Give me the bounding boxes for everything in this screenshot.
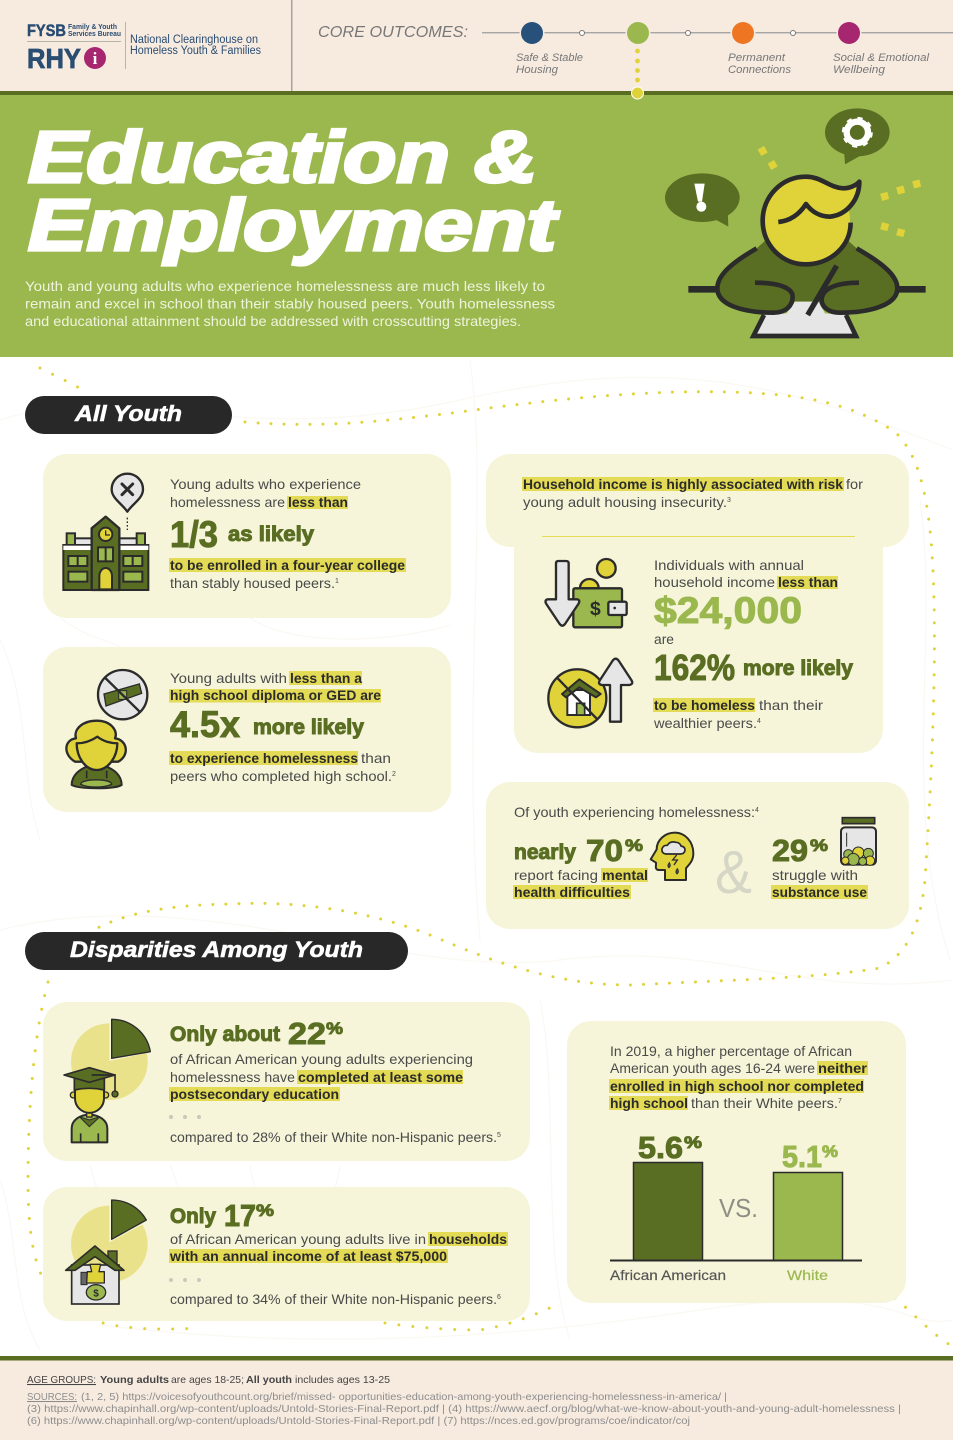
logo: FYSB and RHY: RHY	[27, 43, 81, 74]
text: income heading: 3	[727, 497, 731, 504]
text: one third statistic: Young adults who experience	[170, 476, 361, 492]
core outcomes timeline: Social & Emotional	[833, 52, 930, 64]
text: comparison intro	[609, 1043, 868, 1111]
bar chart: %	[822, 1142, 838, 1161]
logo: FYSB and RHY: National Clearinghouse on	[130, 34, 258, 46]
text: 17 percent statistic: compared to 34% of their White non-Hispanic peers.	[170, 1291, 497, 1307]
text: one third statistic: to be enrolled in a four-year college	[170, 557, 405, 573]
text: income heading: for	[846, 476, 863, 492]
text: 70 percent statistic: nearly	[514, 841, 576, 864]
text: 29 percent statistic: substance use	[772, 884, 867, 900]
bar chart: 5.6	[638, 1130, 683, 1165]
text: 4.5x statistic: high school diploma or GED are	[170, 687, 381, 703]
text: 70 percent statistic: report facing	[514, 867, 598, 883]
icon: pie chart and graduate	[64, 1017, 153, 1142]
logo: FYSB and RHY: Homeless Youth & Families	[130, 45, 261, 57]
footer	[0, 1356, 953, 1440]
icon: student with crossed-out diploma	[66, 670, 147, 788]
logo: FYSB and RHY: i	[93, 49, 98, 68]
logo: FYSB and RHY: Services Bureau	[68, 29, 121, 38]
text: comparison intro: high school	[610, 1095, 688, 1111]
age groups note: AGE GROUPS:	[27, 1374, 96, 1386]
header band	[0, 0, 953, 91]
core outcomes timeline: Safe & Stable	[516, 52, 583, 64]
hero banner	[0, 49, 953, 357]
text: 22 percent statistic: 5	[497, 1132, 501, 1139]
text: 4.5x statistic: than	[361, 750, 391, 766]
panel: household income	[486, 454, 909, 753]
intro text: and educational attainment should be addressed with crosscutting strategies.	[25, 313, 521, 329]
age groups note: All youth	[246, 1374, 292, 1386]
ampersand: &	[715, 839, 752, 906]
text: 17 percent statistic: with an annual income of at least $75,000	[169, 1248, 447, 1264]
text: one third statistic: 1/3	[170, 514, 218, 555]
icon: jar of pills	[841, 818, 876, 865]
icon: head with storm cloud	[651, 833, 693, 880]
bar chart: White	[787, 1267, 828, 1283]
text: income heading: young adult housing insecurity.	[523, 494, 727, 510]
text: 22 percent statistic: postsecondary education	[170, 1086, 339, 1102]
text: 22 percent statistic: Only about	[170, 1023, 280, 1046]
core outcomes timeline	[482, 20, 953, 76]
text: 22 percent statistic	[169, 1016, 501, 1145]
text: 29 percent statistic: %	[810, 836, 828, 855]
text: comparison intro: American youth ages 16-24 were	[610, 1060, 815, 1076]
panel: school enrollment comparison	[567, 1021, 906, 1303]
text: income statistic: wealthier peers.	[653, 715, 757, 731]
text: comparison intro: enrolled in high school nor completed	[610, 1078, 864, 1094]
text: 4.5x statistic: 4.5x	[170, 704, 240, 745]
text: 22 percent statistic: 22	[288, 1016, 326, 1051]
sources: (1, 2, 5) https://voicesofyouthcount.org/brief/missed- opportunities-education-among-youth-experiencing-homelessness-in-america/ |	[81, 1391, 727, 1403]
core outcomes timeline: Housing	[516, 64, 559, 76]
text: 22 percent statistic: completed at least some	[298, 1069, 463, 1085]
text: income statistic	[653, 557, 853, 731]
text: 70 percent statistic: mental	[602, 867, 648, 883]
text: income statistic: Individuals with annual	[654, 557, 804, 573]
text: one third statistic: 1	[335, 578, 339, 585]
panel: mental health and substance use	[486, 782, 909, 929]
panel: 4.5x more likely	[43, 647, 451, 812]
text: panel intro: 4	[755, 807, 759, 814]
sources: (6) https://www.chapinhall.org/wp-content/uploads/Untold-Stories-Final-Report.pdf | (7) https://nces.ed.gov/programs/coe/indicator/coj	[27, 1415, 690, 1427]
core outcomes heading: CORE OUTCOMES:	[318, 24, 468, 41]
text: income statistic: household income	[654, 574, 775, 590]
text: 17 percent statistic: households	[429, 1231, 507, 1247]
text: comparison intro: than their White peers.	[691, 1095, 838, 1111]
text: income statistic: than their	[759, 697, 823, 713]
text: 70 percent statistic: health difficulties	[514, 884, 630, 900]
text: income heading: Household income is highly associated with risk	[523, 476, 843, 492]
text: 17 percent statistic: %	[256, 1201, 274, 1220]
section heading: All Youth	[25, 396, 232, 434]
panel: one third as likely	[43, 454, 451, 618]
text: one third statistic	[169, 476, 406, 591]
text: panel intro: Of youth experiencing homelessness:	[514, 804, 755, 820]
sources	[27, 1391, 901, 1427]
text: 70 percent statistic: 70	[586, 833, 623, 868]
panel: postsecondary education	[43, 1002, 530, 1161]
text: 29 percent statistic: struggle with	[772, 867, 858, 883]
text: 29 percent statistic: 29	[772, 833, 808, 868]
text: 4.5x statistic: Young adults with	[170, 670, 287, 686]
age groups note	[27, 1374, 390, 1386]
text: income statistic: more likely	[743, 657, 853, 680]
text: 22 percent statistic: %	[326, 1019, 343, 1038]
intro text: Youth and young adults who experience homelessness are much less likely to	[25, 278, 545, 294]
text: comparison intro: 7	[838, 1098, 842, 1105]
bar chart: 5.1	[782, 1139, 822, 1174]
selected outcome marker	[632, 49, 644, 99]
section heading: Disparities Among Youth	[25, 932, 408, 970]
text: one third statistic: as likely	[228, 523, 314, 546]
sources: (3) https://www.chapinhall.org/wp-content/uploads/Untold-Stories-Final-Report.pdf | (4) https://www.aecf.org/blog/what-we-know-about-youth-and-young-adult-homelessness |	[27, 1403, 901, 1415]
text: 22 percent statistic: compared to 28% of their White non-Hispanic peers.	[170, 1129, 497, 1145]
text: income statistic: are	[654, 631, 674, 647]
text: income statistic: $24,000	[654, 590, 802, 631]
text: income statistic: 4	[757, 718, 761, 725]
age groups note: Young adults	[100, 1374, 169, 1386]
text: one third statistic: homelessness are	[170, 494, 285, 510]
bar chart: %	[684, 1133, 702, 1152]
text: 4.5x statistic: less than a	[290, 670, 362, 686]
title	[28, 118, 560, 266]
title: Education &	[28, 118, 537, 198]
icon: pie chart and house with money bag: $	[93, 1288, 99, 1299]
text: 17 percent statistic	[169, 1198, 508, 1307]
intro text: remain and excel in school than their stably housed peers. Youth homelessness	[25, 296, 555, 312]
text: income statistic: less than	[778, 574, 838, 590]
text: 4.5x statistic: 2	[392, 771, 396, 778]
text: 70 percent statistic	[513, 833, 648, 900]
icon: wallet with down arrow	[545, 559, 627, 627]
age groups note: are ages 18-25;	[171, 1374, 244, 1386]
icon: school with no-entry pin	[63, 474, 148, 590]
text: income heading	[522, 476, 863, 510]
section heading: Disparities Among Youth: Disparities Among Youth	[70, 937, 363, 962]
text: 4.5x statistic: more likely	[253, 716, 364, 739]
logo: FYSB and RHY	[27, 21, 261, 74]
text: 70 percent statistic: %	[625, 836, 643, 855]
title: Employment	[28, 186, 560, 266]
text: 4.5x statistic: to experience homelessness	[170, 750, 358, 766]
text: 4.5x statistic	[169, 670, 396, 784]
text: comparison intro: In 2019, a higher percentage of African	[610, 1043, 852, 1059]
text: income statistic: to be homeless	[654, 697, 755, 713]
core outcomes timeline: Wellbeing	[833, 64, 886, 76]
text: 4.5x statistic: peers who completed high school.	[170, 768, 392, 784]
text: comparison intro: neither	[818, 1060, 868, 1076]
age groups note: includes ages 13-25	[295, 1374, 390, 1386]
logo: FYSB and RHY: FYSB	[27, 21, 66, 40]
intro text	[25, 278, 555, 329]
text: 17 percent statistic: of African American young adults live in	[170, 1231, 426, 1247]
bar chart: VS.	[719, 1193, 758, 1223]
text: 17 percent statistic: 6	[497, 1294, 501, 1301]
core outcomes timeline: Permanent	[728, 52, 786, 64]
logo: FYSB and RHY: Family & Youth	[68, 22, 117, 31]
core outcomes timeline: Connections	[728, 64, 792, 76]
sources: SOURCES:	[27, 1391, 77, 1403]
text: 17 percent statistic: Only	[170, 1205, 216, 1228]
icon: wallet with down arrow: $	[590, 599, 601, 620]
text: 29 percent statistic	[771, 833, 868, 900]
bar chart: African American	[610, 1267, 726, 1283]
section heading: All Youth: All Youth	[74, 401, 182, 426]
text: one third statistic: than stably housed peers.	[170, 575, 335, 591]
text: one third statistic: less than	[288, 494, 348, 510]
icon: pie chart and house with money bag	[66, 1197, 153, 1304]
text: income statistic: 162%	[654, 647, 735, 688]
panel: household income of 75,000	[43, 1187, 530, 1321]
text: 17 percent statistic: 17	[224, 1198, 256, 1233]
icon: person writing at desk with speech bubbles	[665, 108, 926, 336]
text: 22 percent statistic: of African American young adults experiencing	[170, 1051, 473, 1067]
icon: crossed-out house with up arrow	[548, 659, 632, 727]
bar chart	[610, 1130, 862, 1283]
text: 22 percent statistic: homelessness have	[170, 1069, 295, 1085]
